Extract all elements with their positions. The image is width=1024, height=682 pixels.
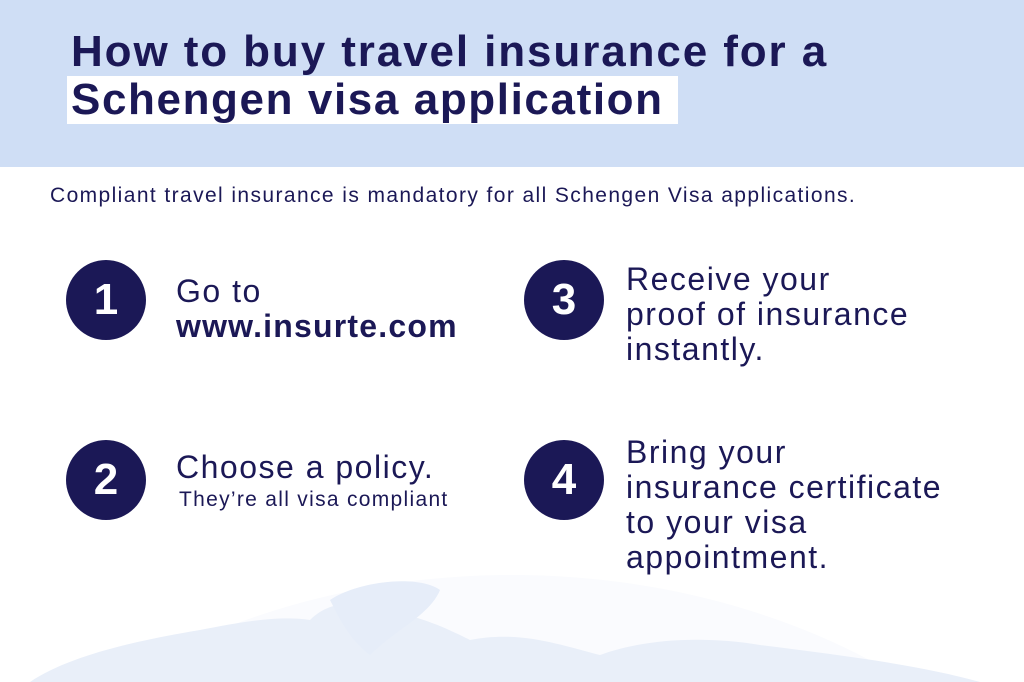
icon: number 2: 2 <box>94 455 118 504</box>
step 4 text: insurance certificate <box>626 469 942 505</box>
title: How to buy travel insurance for a <box>71 27 828 76</box>
step 3 <box>524 260 909 367</box>
step 1 <box>66 260 458 344</box>
icon: number 3 <box>524 260 604 340</box>
header band <box>0 0 1024 167</box>
icon: number 1: 1 <box>94 275 118 324</box>
step 3 text <box>626 261 909 367</box>
step 2 <box>66 440 449 520</box>
title <box>67 27 828 124</box>
step 2 text: Choose a policy. <box>176 449 434 485</box>
step 3 text: Receive your <box>626 261 831 297</box>
step 3 text: proof of insurance <box>626 296 909 332</box>
icon: number 4 <box>524 440 604 520</box>
step 2 text <box>176 449 449 511</box>
subtitle: Compliant travel insurance is mandatory for all Schengen Visa applications. <box>50 184 856 207</box>
icon: number 2 <box>66 440 146 520</box>
step 1 text: www.insurte.com <box>176 308 458 344</box>
icon: number 4: 4 <box>552 455 576 504</box>
icon: number 3: 3 <box>552 275 576 324</box>
step 1 text: Go to <box>176 273 262 309</box>
step 4 <box>524 434 942 575</box>
step 4 text: Bring your <box>626 434 787 470</box>
step 2 text: They’re all visa compliant <box>179 488 449 511</box>
step 4 text: to your visa <box>626 504 808 540</box>
step 1 text <box>176 273 458 344</box>
icon: number 1 <box>66 260 146 340</box>
step 4 text: appointment. <box>626 539 829 575</box>
title: Schengen visa application <box>71 75 664 124</box>
step 3 text: instantly. <box>626 331 765 367</box>
globe background <box>30 581 980 682</box>
step 4 text <box>626 434 942 575</box>
